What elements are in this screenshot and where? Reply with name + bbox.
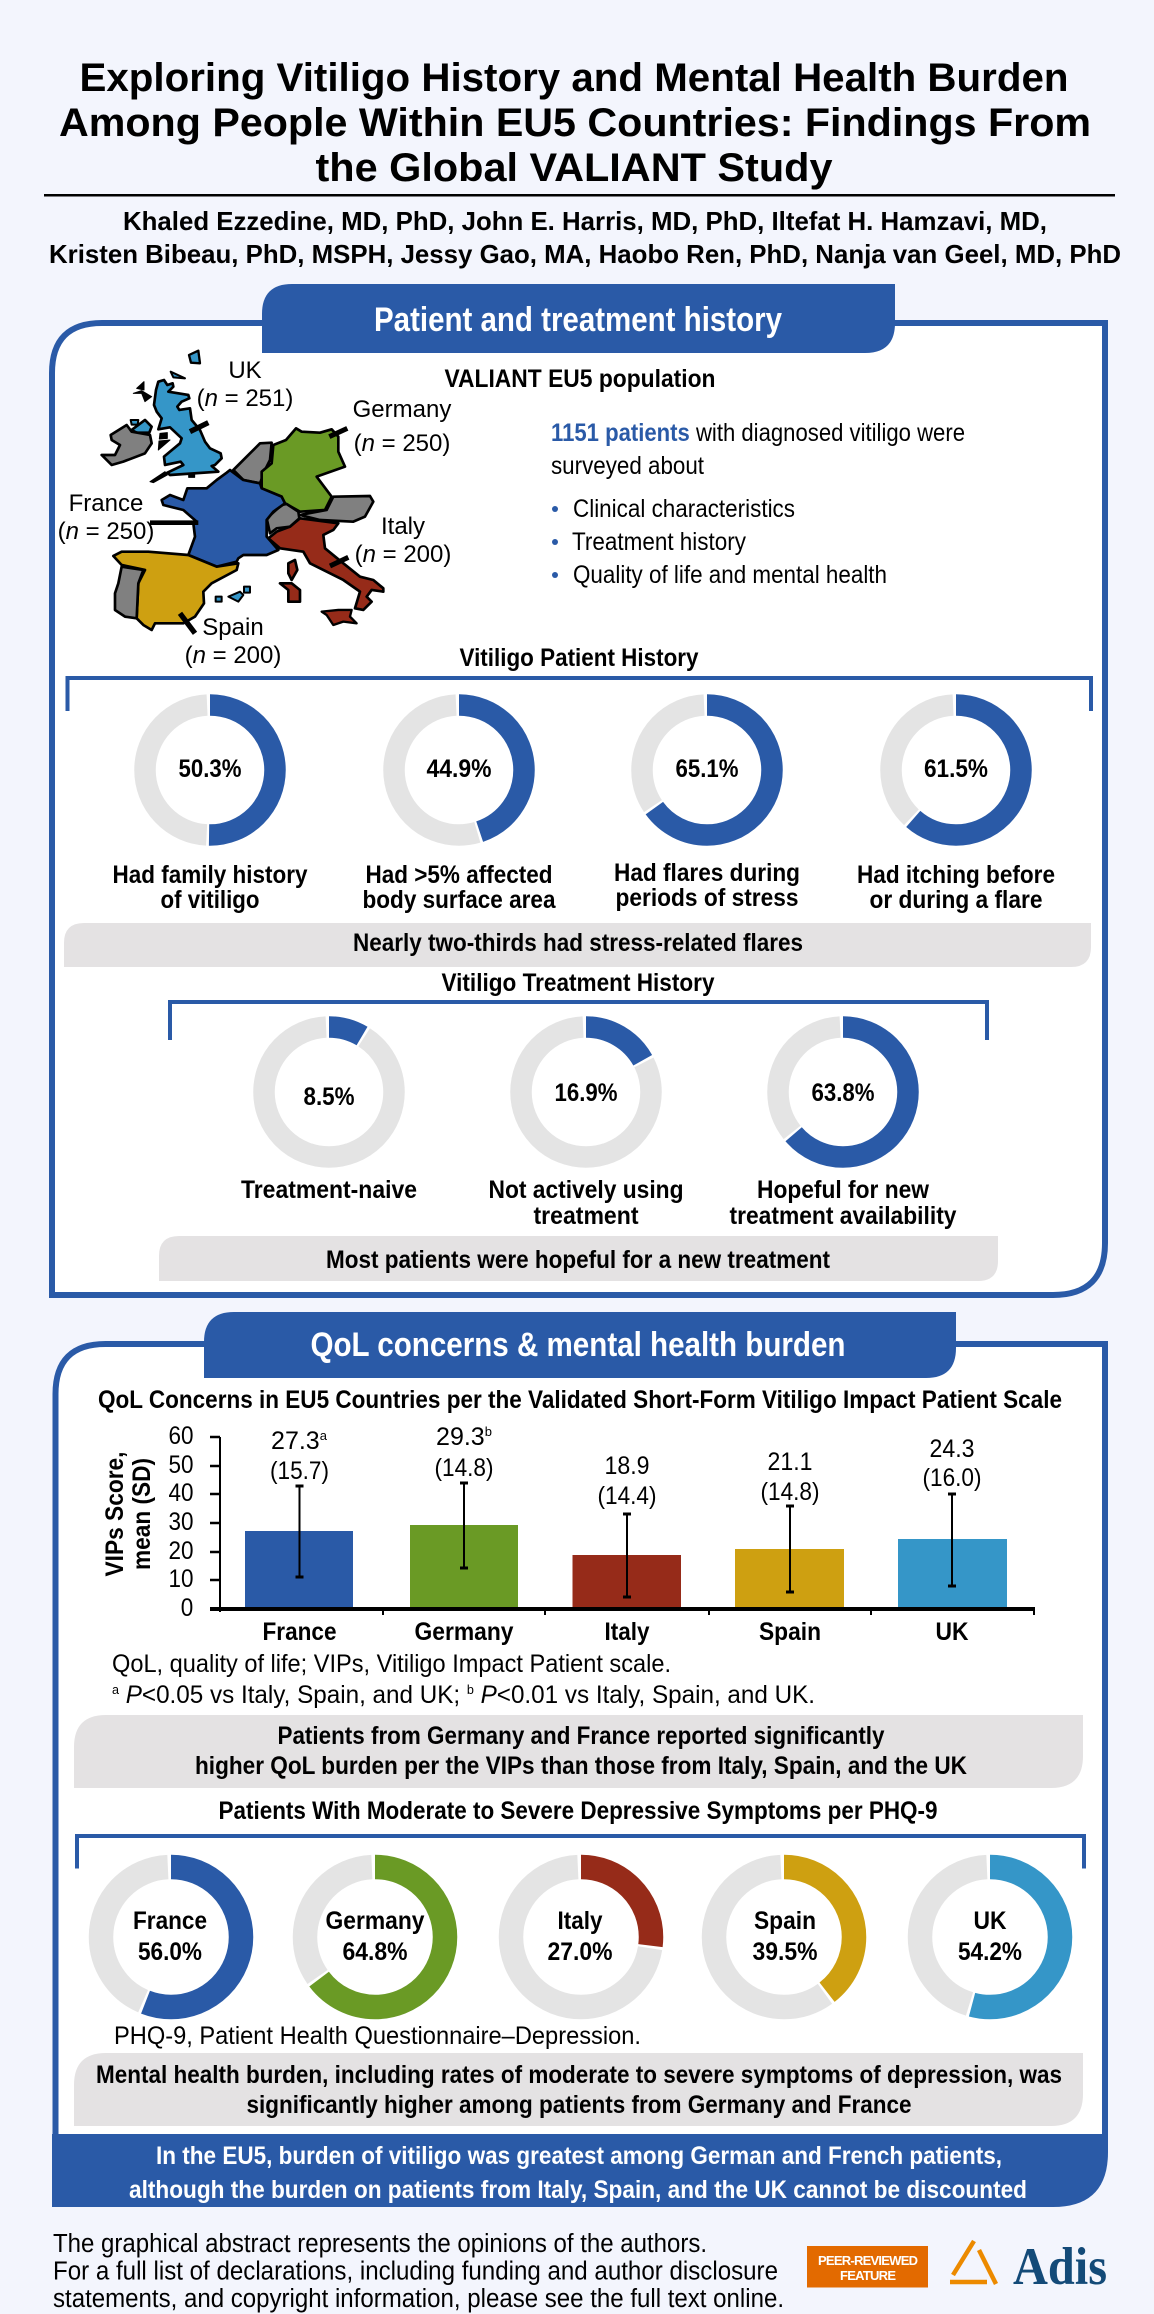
category labels: Germany <box>414 1618 514 1646</box>
bar chart: VIPs score <box>101 1422 1035 1646</box>
badge: peer-reviewed feature: PEER-REVIEWED <box>818 2253 918 2268</box>
map labels: (n = 251) <box>197 385 293 412</box>
callout: hopeful for new treatment: Most patients were hopeful for a new treatment <box>326 1246 831 1274</box>
value labels: 27.3 <box>271 1427 320 1455</box>
y axis labels: 20 <box>168 1537 194 1565</box>
caption: itching <box>857 861 1055 914</box>
value labels: (14.8) <box>760 1478 820 1506</box>
donut: hopeful 63.8% <box>778 1027 908 1157</box>
donut: affected BSA 44.9%: 44.9% <box>426 755 492 783</box>
donut: hopeful 63.8%: 63.8% <box>812 1079 874 1107</box>
caption: itching: Had itching before <box>857 861 1055 889</box>
panel: patient and treatment history <box>52 284 1105 1295</box>
footnote: PHQ-9: PHQ-9, Patient Health Questionnaire–Depression. <box>114 2022 641 2050</box>
footnote: QoL abbreviations: b <box>467 1682 474 1697</box>
donut: Germany 64.8%: Germany <box>326 1907 425 1935</box>
caption: not actively using treatment: treatment <box>534 1202 639 1230</box>
y axis labels <box>168 1422 194 1622</box>
donut: France 56.0%: France <box>133 1907 207 1935</box>
callout: mental health burden <box>74 2053 1083 2126</box>
value labels: (14.4) <box>598 1482 656 1510</box>
badge: peer-reviewed feature: FEATURE <box>840 2268 896 2283</box>
y axis labels: 50 <box>168 1451 194 1479</box>
map labels: (n = 200) <box>185 642 281 669</box>
value labels: (16.0) <box>922 1464 982 1492</box>
caption: not actively using treatment <box>488 1176 684 1230</box>
donut: not actively using treatment 16.9% <box>521 1027 651 1157</box>
value labels: (15.7) <box>270 1457 329 1485</box>
footnote: QoL abbreviations: P<0.01 vs Italy, Spain, and UK. <box>481 1681 825 1709</box>
authors: Kristen Bibeau, PhD, MSPH, Jessy Gao, MA, Haobo Ren, PhD, Nanja van Geel, MD, PhD <box>49 239 1121 269</box>
map labels: (n = 250) <box>58 518 154 545</box>
caption: affected BSA <box>362 861 556 914</box>
caption: family history <box>112 861 308 914</box>
y axis labels: 30 <box>168 1508 194 1536</box>
value labels: 24.3 <box>930 1435 974 1463</box>
continental Europe <box>233 428 383 610</box>
title <box>59 56 1091 190</box>
panel: QoL concerns and mental health burden <box>52 1312 1108 2207</box>
donut: stress flares 65.1%: 65.1% <box>676 755 738 783</box>
text block: survey description: 1151 patients with diagnosed vitiligo were <box>551 419 965 447</box>
title: Exploring Vitiligo History and Mental Health Burden <box>80 56 1068 100</box>
donut: Italy 27.0%: 27.0% <box>548 1938 612 1966</box>
donut: UK 54.2%: 54.2% <box>958 1938 1022 1966</box>
map labels: Germany <box>353 396 451 423</box>
section tab: QoL concerns: QoL concerns & mental health burden <box>310 1326 846 1364</box>
footnote: QoL abbreviations: QoL, quality of life; VIPs, Vitiligo Impact Patient scale. <box>112 1650 671 1678</box>
footnote: QoL abbreviations <box>112 1650 815 1709</box>
caption: family history: of vitiligo <box>160 886 260 914</box>
text block: survey description <box>551 419 965 589</box>
donut: Spain 39.5%: Spain <box>754 1907 816 1935</box>
donut: UK 54.2% <box>920 1867 1060 2007</box>
value labels <box>270 1423 982 1510</box>
heading: PHQ-9 depressive symptoms: Patients With Moderate to Severe Depressive Symptoms per PHQ-9 <box>218 1797 938 1825</box>
category labels: Spain <box>759 1618 821 1646</box>
callout: mental health burden: Mental health burden, including rates of moderate to severe symptoms of depression, was <box>96 2061 1062 2089</box>
donut: treatment-naive 8.5% <box>264 1027 394 1157</box>
logo: Adis <box>950 2238 1107 2296</box>
value labels: a <box>320 1428 328 1443</box>
category labels: France <box>262 1618 337 1646</box>
caption: hopeful: Hopeful for new <box>757 1176 929 1204</box>
footnote: QoL abbreviations: a <box>112 1682 120 1697</box>
footer disclaimer: statements, and copyright information, please see the full text online. <box>53 2285 784 2313</box>
category labels <box>262 1618 968 1646</box>
caption: itching: or during a flare <box>870 886 1043 914</box>
callout: stress-related flares: Nearly two-thirds had stress-related flares <box>353 929 803 957</box>
text block: survey description: Quality of life and mental health <box>573 561 887 589</box>
donut: not actively using treatment 16.9%: 16.9% <box>554 1079 618 1107</box>
UK and Ireland <box>102 351 222 483</box>
donut: affected BSA 44.9% <box>394 705 524 835</box>
text block: survey description: surveyed about <box>551 452 704 480</box>
category labels: Italy <box>604 1618 650 1646</box>
caption: stress flares <box>614 859 800 912</box>
donut: UK 54.2%: UK <box>974 1907 1006 1935</box>
Sicily <box>322 610 357 625</box>
donut: itching 61.5%: 61.5% <box>924 755 988 783</box>
caption: treatment-naive: Treatment-naive <box>241 1176 417 1204</box>
section tab: patient and treatment history: Patient and treatment history <box>374 301 782 339</box>
donut: Spain 39.5%: 39.5% <box>752 1938 818 1966</box>
map labels: France <box>69 490 143 517</box>
value labels: 29.3 <box>436 1423 485 1451</box>
summary band <box>52 2134 1108 2207</box>
caption: hopeful: treatment availability <box>730 1202 957 1230</box>
value labels: b <box>485 1424 492 1439</box>
logo: Adis: Adis <box>1013 2238 1107 2296</box>
authors <box>49 206 1121 269</box>
section tab: QoL concerns <box>204 1312 956 1378</box>
caption: affected BSA: Had >5% affected <box>366 861 552 889</box>
donut: Italy 27.0%: Italy <box>558 1907 603 1935</box>
donut: France 56.0% <box>101 1867 241 2007</box>
title: the Global VALIANT Study <box>316 146 833 190</box>
callout: stress-related flares <box>64 923 1091 967</box>
y axis labels: 10 <box>168 1565 194 1593</box>
value labels: 18.9 <box>604 1452 650 1480</box>
footer disclaimer: For a full list of declarations, including funding and author disclosure <box>53 2258 778 2286</box>
map labels <box>58 357 451 669</box>
caption: not actively using treatment: Not actively using <box>488 1176 684 1204</box>
text block: survey description: Clinical characteristics <box>573 495 795 523</box>
France, Spain and Portugal <box>113 470 285 633</box>
y axis title: mean (SD) <box>128 1458 156 1570</box>
value labels: 21.1 <box>768 1448 812 1476</box>
text block: survey description: Treatment history <box>572 528 746 556</box>
donut: family history 50.3% <box>145 705 275 835</box>
error bars <box>296 1483 956 1597</box>
map labels: (n = 250) <box>354 430 450 457</box>
footer disclaimer: The graphical abstract represents the opinions of the authors. <box>53 2230 707 2258</box>
callout: QoL burden <box>74 1715 1083 1788</box>
map labels: Italy <box>381 513 425 540</box>
category labels: UK <box>936 1618 968 1646</box>
section tab: patient and treatment history <box>262 284 895 353</box>
badge: peer-reviewed feature <box>807 2246 928 2288</box>
donut: Spain 39.5% <box>714 1867 854 2007</box>
map labels: (n = 200) <box>355 541 451 568</box>
caption: family history: Had family history <box>112 861 308 889</box>
callout: QoL burden: Patients from Germany and France reported significantly <box>278 1722 885 1750</box>
callout: mental health burden: significantly higher among patients from Germany and France <box>246 2091 912 2119</box>
caption: stress flares: Had flares during <box>614 859 800 887</box>
heading: VALIANT EU5 population: VALIANT EU5 population <box>444 365 716 393</box>
map: EU5 countries <box>58 351 451 669</box>
footer disclaimer <box>53 2230 784 2313</box>
map labels: UK <box>228 357 262 384</box>
heading: vitiligo patient history: Vitiligo Patient History <box>460 644 699 672</box>
title: Among People Within EU5 Countries: Findings From <box>59 101 1091 145</box>
value labels: (14.8) <box>434 1454 494 1482</box>
summary band: In the EU5, burden of vitiligo was greatest among German and French patients, <box>156 2142 1002 2170</box>
y axis labels: 40 <box>168 1479 194 1507</box>
y axis title: VIPs Score, <box>101 1452 129 1576</box>
donut: Germany 64.8% <box>305 1867 445 2007</box>
heading: QoL concerns in EU5: QoL Concerns in EU5 Countries per the Validated Short-Form Vitiligo Impact Patient Scale <box>98 1386 1062 1414</box>
bars <box>245 1525 1007 1609</box>
y axis labels: 60 <box>168 1422 194 1450</box>
donut: itching 61.5% <box>891 705 1021 835</box>
y axis labels: 0 <box>181 1594 193 1622</box>
donut: Germany 64.8%: 64.8% <box>342 1938 408 1966</box>
footnote: QoL abbreviations: P<0.05 vs Italy, Spain, and UK; <box>126 1681 470 1709</box>
authors: Khaled Ezzedine, MD, PhD, John E. Harris, MD, PhD, Iltefat H. Hamzavi, MD, <box>123 206 1047 236</box>
donut: treatment-naive 8.5%: 8.5% <box>304 1083 354 1111</box>
donut: stress flares 65.1% <box>642 705 772 835</box>
heading: vitiligo treatment history: Vitiligo Treatment History <box>442 969 715 997</box>
callout: hopeful for new treatment <box>159 1236 998 1281</box>
caption: stress flares: periods of stress <box>616 884 798 912</box>
y axis title <box>101 1452 156 1576</box>
donut: Italy 27.0% <box>511 1867 651 2007</box>
callout: QoL burden: higher QoL burden per the VIPs than those from Italy, Spain, and the UK <box>195 1752 967 1780</box>
donut: family history 50.3%: 50.3% <box>178 755 242 783</box>
summary band: although the burden on patients from Italy, Spain, and the UK cannot be discounted <box>129 2176 1027 2204</box>
donut: France 56.0%: 56.0% <box>138 1938 202 1966</box>
caption: affected BSA: body surface area <box>362 886 556 914</box>
caption: hopeful <box>730 1176 957 1230</box>
map labels: Spain <box>202 614 264 641</box>
